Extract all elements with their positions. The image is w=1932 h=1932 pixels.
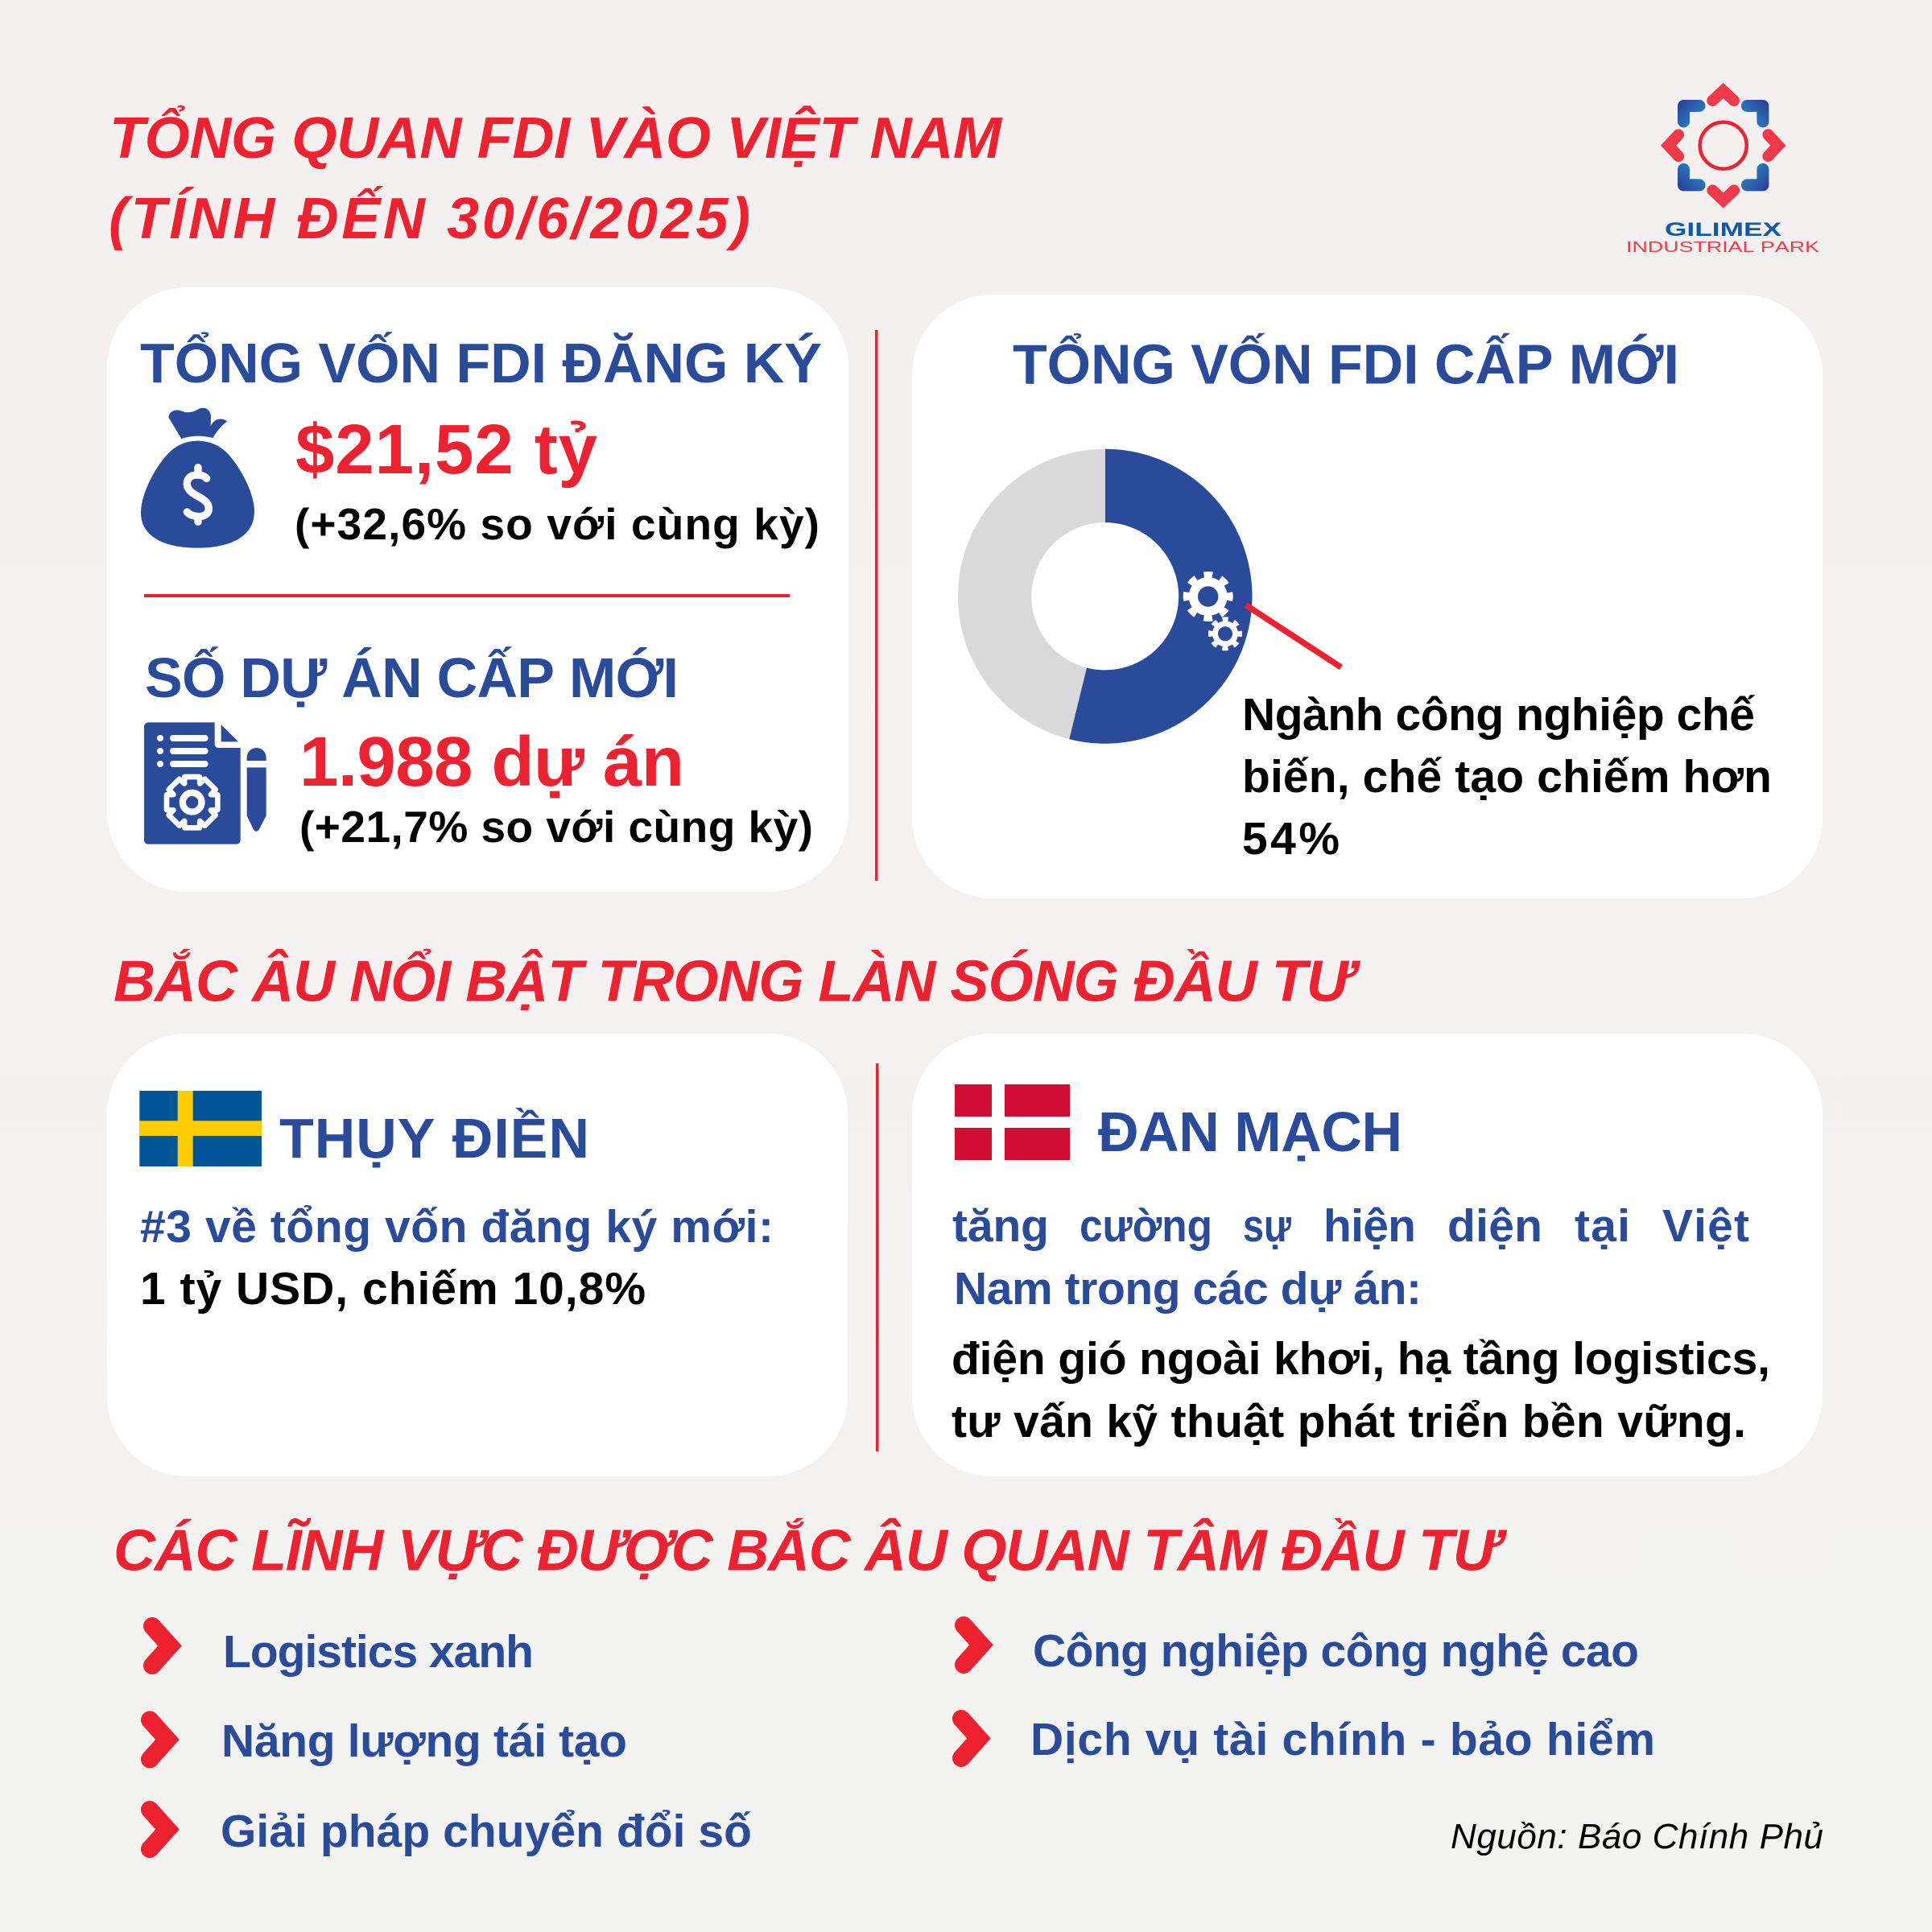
sector: renewable energy: Năng lượng tái tạo: [221, 1715, 627, 1767]
presence text: Việt: [1662, 1200, 1749, 1252]
presence text: sự: [1243, 1200, 1292, 1252]
panel: Denmark: [912, 1034, 1823, 1476]
title: TỔNG QUAN FDI VÀO VIỆT NAM: [109, 105, 1003, 171]
presence text: tăng: [952, 1200, 1049, 1252]
project list text: tư vấn kỹ thuật phát triển bền vững.: [952, 1396, 1746, 1447]
callout text: 54%: [1242, 813, 1340, 865]
icon: Denmark flag: [955, 1084, 1070, 1160]
title: (TÍNH ĐẾN 30/6/2025): [109, 186, 750, 251]
logo tagline: INDUSTRIAL PARK: [1626, 239, 1819, 255]
icon: money bag: [141, 408, 254, 548]
sector: green logistics: Logistics xanh: [223, 1626, 534, 1678]
change: +32.6%: (+32,6% so với cùng kỳ): [295, 499, 819, 549]
heading: Denmark: ĐAN MẠCH: [1098, 1100, 1402, 1163]
vertical divider top: [875, 330, 877, 881]
icon: gears: [1187, 575, 1240, 648]
value: 1,988 projects: 1.988 dự án: [299, 723, 684, 801]
rank text: #3 về tổng vốn đăng ký mới:: [140, 1201, 774, 1253]
project list text: điện gió ngoài khơi, hạ tầng logistics,: [952, 1333, 1770, 1385]
project list text: [952, 1333, 1770, 1447]
panel: newly licensed FDI: [912, 295, 1823, 898]
sector: high-tech industry: Công nghiệp công nghệ cao: [1033, 1625, 1639, 1677]
panel: registered capital and new projects: [107, 287, 848, 892]
source note: Nguồn: Báo Chính Phủ: [1451, 1817, 1823, 1856]
callout text: Ngành công nghiệp chế: [1242, 689, 1755, 741]
callout text: biến, chế tạo chiếm hơn: [1242, 751, 1772, 803]
title: [109, 105, 1003, 251]
panel: Sweden: [107, 1034, 848, 1476]
presence text: diện: [1447, 1200, 1542, 1252]
change: +21.7%: (+21,7% so với cùng kỳ): [299, 802, 813, 852]
sector list: [150, 1625, 1655, 1857]
heading: Sweden: THỤY ĐIỀN: [279, 1107, 589, 1170]
vertical divider bottom: [876, 1063, 879, 1451]
presence text: cường: [1080, 1200, 1212, 1252]
logo name: GILIMEX: [1665, 219, 1781, 241]
icon: chevron: [964, 1625, 981, 1665]
logo: Gilimex Industrial Park: [1626, 90, 1819, 255]
icon: chevron: [961, 1719, 979, 1758]
donut chart: manufacturing 54%: [995, 449, 1252, 744]
presence text: tại: [1575, 1200, 1630, 1252]
heading: total registered FDI: TỔNG VỐN FDI ĐĂNG KÝ: [140, 331, 822, 394]
presence text: hiện: [1323, 1200, 1416, 1252]
divider line: [144, 594, 790, 597]
amount text: 1 tỷ USD, chiếm 10,8%: [140, 1263, 646, 1315]
icon: chevron: [150, 1719, 167, 1760]
heading: new projects: SỐ DỰ ÁN CẤP MỚI: [145, 646, 679, 709]
callout line: [1246, 605, 1341, 667]
icon: chevron: [150, 1810, 167, 1849]
sector: finance and insurance: Dịch vụ tài chính - bảo hiểm: [1030, 1714, 1655, 1765]
heading: sectors of interest: CÁC LĨNH VỰC ĐƯỢC BẮC ÂU QUAN TÂM ĐẦU TƯ: [114, 1518, 1508, 1583]
heading: Nordic highlight: BẮC ÂU NỔI BẬT TRONG LÀN SÓNG ĐẦU TƯ: [114, 948, 1361, 1014]
heading: newly licensed FDI: TỔNG VỐN FDI CẤP MỚI: [1013, 332, 1679, 396]
value: 21.52 billion: $21,52 tỷ: [295, 411, 597, 489]
icon: chevron: [152, 1626, 170, 1666]
presence text: Nam trong các dự án:: [954, 1263, 1422, 1315]
callout text: [1242, 689, 1772, 865]
presence text: [952, 1200, 1749, 1315]
icon: Sweden flag: [139, 1091, 262, 1166]
sector: digital transformation: Giải pháp chuyển đổi số: [221, 1806, 752, 1857]
icon: document with gear and pen: [144, 722, 266, 844]
logo mark: [1668, 90, 1778, 200]
